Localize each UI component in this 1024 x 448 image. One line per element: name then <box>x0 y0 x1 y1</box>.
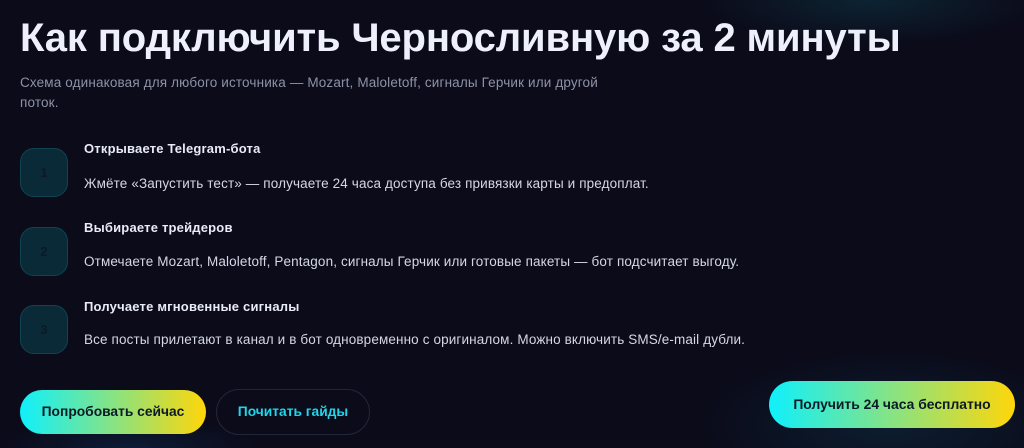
subtitle <box>20 75 598 110</box>
subtitle: Схема одинаковая для любого источника — Mozart, Maloletoff, сигналы Герчик или другой <box>20 75 598 90</box>
step 1 number badge <box>20 148 68 197</box>
step 3 <box>20 299 745 354</box>
button: read guides <box>216 389 370 435</box>
button: try now: Попробовать сейчас <box>42 404 184 419</box>
button: get 24 hours free: Получить 24 часа бесплатно <box>793 396 991 412</box>
step 1 number badge: 1 <box>40 165 48 180</box>
subtitle: поток. <box>20 95 59 110</box>
step 3 number badge <box>20 305 68 354</box>
button: read guides: Почитать гайды <box>238 404 348 419</box>
step 2 <box>20 220 739 276</box>
button: get 24 hours free <box>769 381 1015 428</box>
button: try now <box>20 390 206 434</box>
step 2 description: Отмечаете Mozart, Maloletoff, Pentagon, сигналы Герчик или готовые пакеты — бот подсчитает выгоду. <box>84 254 739 269</box>
title: Как подключить Черносливную за 2 минуты <box>20 16 901 60</box>
step 2 number badge: 2 <box>40 244 48 259</box>
step 3 description: Все посты прилетают в канал и в бот одновременно с оригиналом. Можно включить SMS/e-mail дубли. <box>84 332 745 347</box>
step 1 description: Жмёте «Запустить тест» — получаете 24 часа доступа без привязки карты и предоплат. <box>84 176 649 191</box>
step 1 heading: Открываете Telegram-бота <box>84 141 261 156</box>
step 3 heading: Получаете мгновенные сигналы <box>84 299 300 314</box>
step 1 <box>20 141 649 197</box>
step 2 number badge <box>20 227 68 276</box>
step 2 heading: Выбираете трейдеров <box>84 220 233 235</box>
step 3 number badge: 3 <box>40 322 48 337</box>
